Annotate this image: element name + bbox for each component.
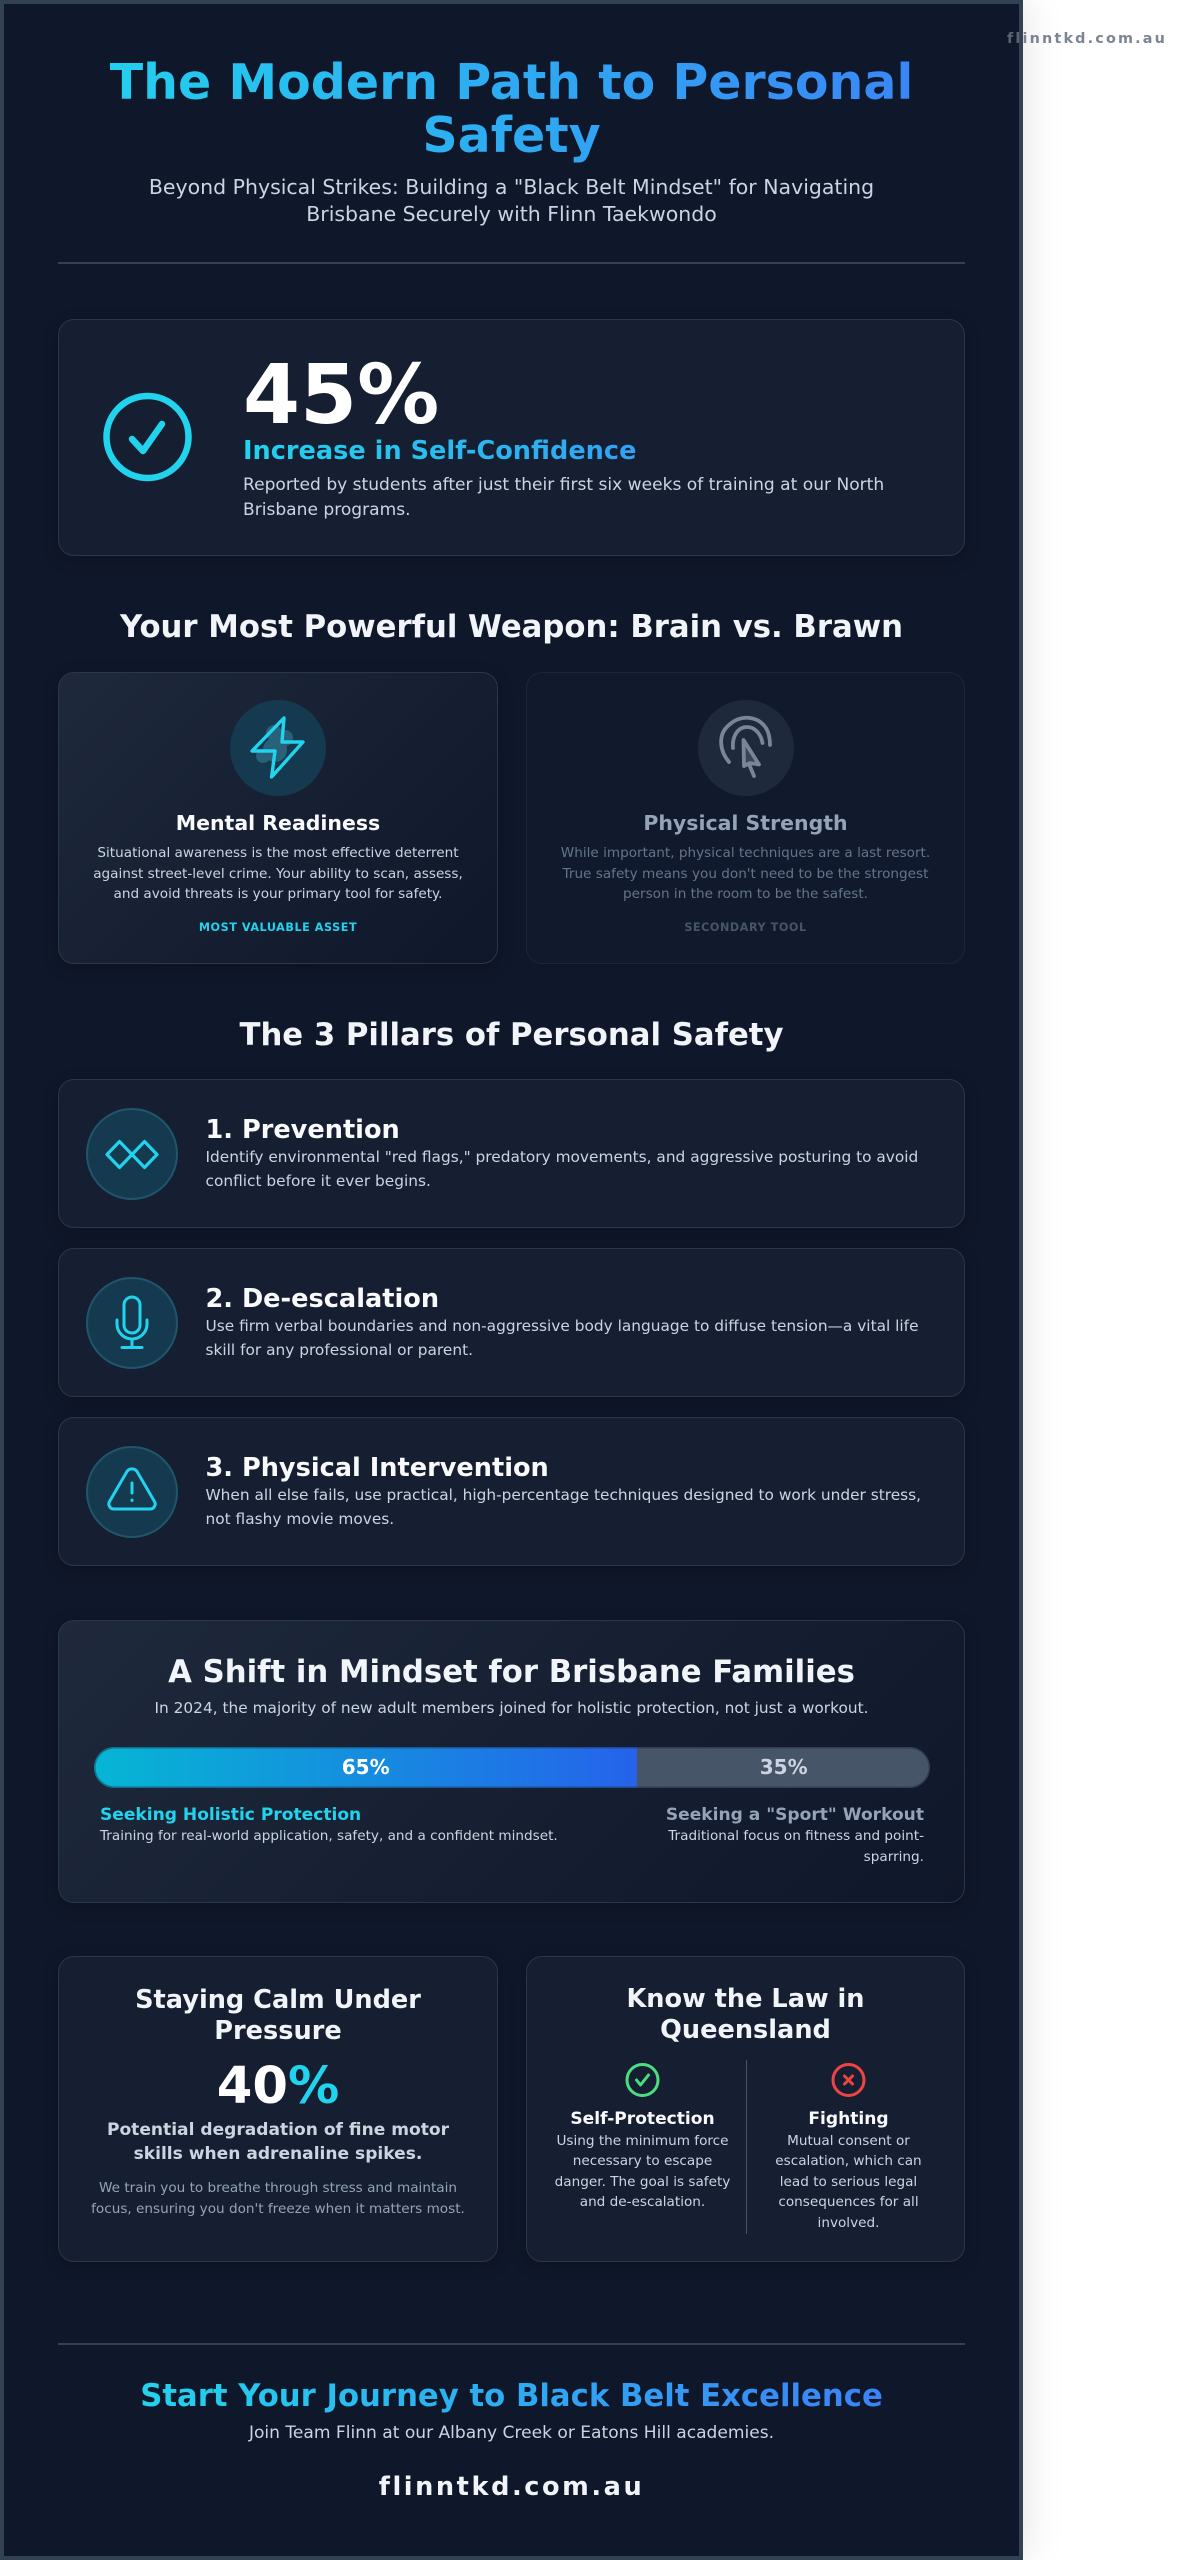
big number: 40% [217,2056,339,2116]
stat description [243,475,884,520]
panel: 45% stat [58,319,965,556]
legend text: holistic: Training for real-world application, safety, and a confident mindset. [100,1828,558,1844]
card text: True safety means you don't need to be the strongest [563,866,928,882]
icon: zap [230,700,326,796]
icon: check circle [103,392,192,482]
pillar text [206,1148,918,1190]
column text: Using the minimum force [556,2133,729,2149]
card text: against street-level crime. Your ability to scan, assess, [93,866,463,882]
icon: prevention [86,1108,178,1200]
card text: While important, physical techniques are a last resort. [561,845,930,861]
legend text: sport: sparring. [864,1848,924,1864]
pillar text [206,1486,921,1528]
pillar text: skill for any professional or parent. [206,1341,473,1359]
card title: Physical Strength [643,811,848,835]
stat label: Increase in Self-Confidence [243,436,636,466]
panel: know the law [526,1956,965,2262]
pillar text: Identify environmental "red flags," predatory movements, and aggressive posturing to avoid [206,1148,918,1166]
bar: 35%: 35% [760,1755,808,1779]
panel: de-escalation [58,1248,965,1397]
card title: Mental Readiness [176,811,380,835]
call to action text: Join Team Flinn at our Albany Creek or Eatons Hill academies. [249,2423,774,2443]
heading: pillars: The 3 Pillars of Personal Safety [239,1017,784,1053]
panel: physical intervention [58,1417,965,1566]
website url: flinntkd.com.au [379,2472,644,2502]
heading [135,1985,421,2046]
stacked bar chart [94,1747,930,1788]
panel: mental readiness [58,672,498,964]
pillar text [206,1317,919,1359]
column text: necessary to escape [573,2153,712,2169]
heading: Know the Law in [626,1984,865,2014]
card text: and avoid threats is your primary tool for safety. [114,886,442,902]
subtitle: Beyond Physical Strikes: Building a "Black Belt Mindset" for Navigating [149,175,874,199]
pillar text: not flashy movie moves. [206,1510,394,1528]
heading: Queensland [660,2015,831,2045]
card text [93,845,463,902]
supporting text [91,2180,465,2216]
card text: Situational awareness is the most effective deterrent [97,845,459,861]
column text: consequences for all [778,2194,919,2210]
column title: Fighting [808,2109,889,2129]
supporting text: focus, ensuring you don't freeze when it matters most. [91,2200,465,2216]
pillar title: 1. Prevention [206,1115,400,1145]
tag: SECONDARY TOOL [684,921,807,934]
panel: shift in mindset [58,1620,965,1903]
pillar title: 3. Physical Intervention [206,1453,549,1483]
icon: warning triangle [86,1446,178,1538]
card text: person in the room to be the safest. [623,886,868,902]
legend text: sport: Traditional focus on fitness and point- [668,1828,924,1844]
column text: involved. [818,2215,879,2231]
column title: Self-Protection [570,2109,715,2129]
card text [561,845,930,902]
stat description: Reported by students after just their first six weeks of training at our North [243,475,884,495]
stat label [243,433,903,469]
heading [626,1984,865,2045]
supporting text: We train you to breathe through stress and maintain [99,2180,457,2196]
pillar text: When all else fails, use practical, high-percentage techniques designed to work under stress, [206,1486,921,1504]
column text: Mutual consent or [787,2133,910,2149]
stat description: skills when adrenaline spikes. [134,2144,422,2164]
panel: prevention [58,1079,965,1228]
column: fighting [775,2109,922,2231]
call to action heading: Start Your Journey to Black Belt Excellence [140,2378,883,2414]
description: In 2024, the majority of new adult members joined for holistic protection, not just a workout. [154,1699,869,1717]
icon: red cross [832,2063,866,2097]
column text [555,2133,730,2210]
column text: lead to serious legal [780,2174,917,2190]
pillar text: conflict before it ever begins. [206,1172,431,1190]
watermark: flinntkd.com.au [1007,31,1167,47]
column: self-protection [555,2109,730,2210]
stat description [107,2120,449,2164]
title: The Modern Path to Personal Safety [110,54,913,164]
column text: danger. The goal is safety [555,2174,730,2190]
heading: Pressure [214,2016,342,2046]
legend: sport: Seeking a "Sport" Workout [666,1805,924,1825]
pillar title: 2. De-escalation [206,1284,439,1314]
tag: MOST VALUABLE ASSET [199,921,357,934]
subtitle [149,175,874,226]
heading: brain vs brawn: Your Most Powerful Weapon: Brain vs. Brawn [120,609,903,645]
panel: physical strength [526,672,965,964]
stat description: Brisbane programs. [243,500,411,520]
icon: microphone [86,1277,178,1369]
bar: 65% [94,1747,637,1788]
heading: A Shift in Mindset for Brisbane Families [168,1654,855,1690]
pillar text: Use firm verbal boundaries and non-aggressive body language to diffuse tension—a vital life [206,1317,919,1335]
bar: 65%: 65% [342,1755,390,1779]
icon: green check [626,2063,660,2097]
icon: pointer [698,700,794,796]
divider [746,2060,747,2234]
stat description: Potential degradation of fine motor [107,2120,449,2140]
column text [775,2133,922,2231]
column text: and de-escalation. [580,2194,705,2210]
heading: Staying Calm Under [135,1985,421,2015]
big number: 45% [243,348,439,443]
subtitle: Brisbane Securely with Flinn Taekwondo [306,202,717,226]
legend text: sport [668,1828,924,1864]
panel: staying calm [58,1956,498,2262]
column text: escalation, which can [775,2153,922,2169]
legend: holistic: Seeking Holistic Protection [100,1805,361,1825]
